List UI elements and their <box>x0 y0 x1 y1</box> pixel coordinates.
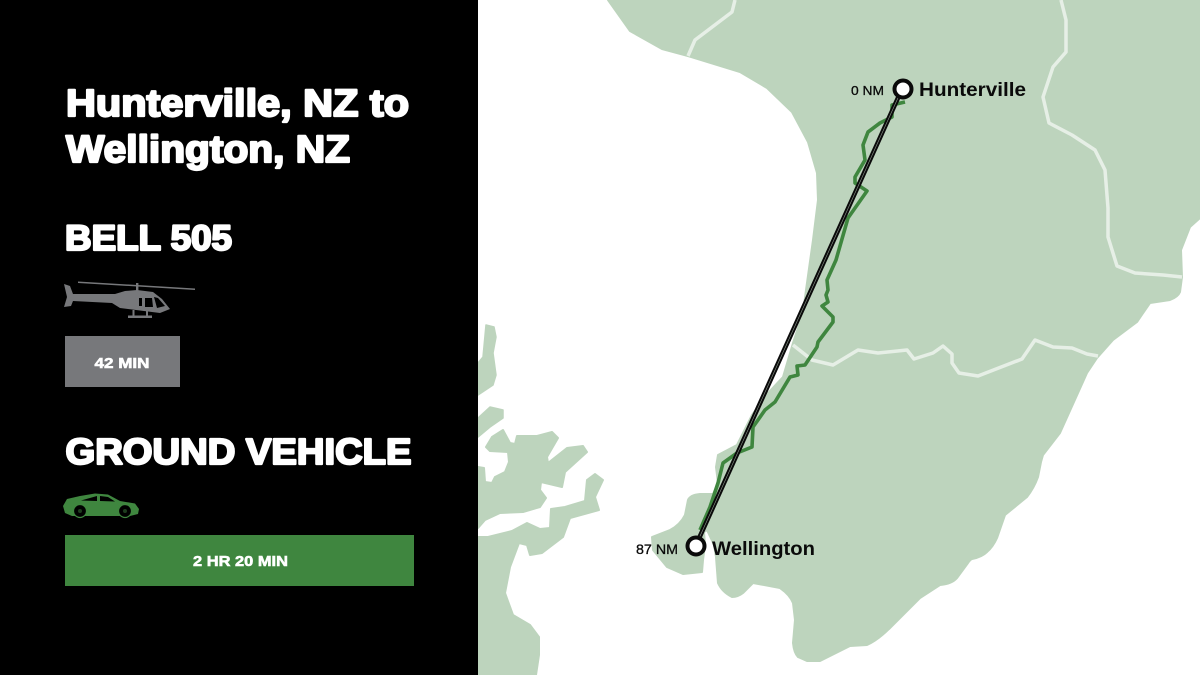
panel: left sidebar <box>0 0 478 675</box>
bar: ground vehicle time <box>65 535 414 586</box>
land: western island, south <box>478 474 603 675</box>
map <box>478 0 1200 675</box>
marker: Wellington <box>688 538 704 554</box>
region borders <box>688 0 1182 376</box>
title: Wellington, NZ <box>66 129 350 171</box>
heading: Bell 505: BELL 505 <box>65 219 232 258</box>
land: western island, sound <box>478 430 587 528</box>
title <box>66 83 409 171</box>
marker: Hunterville <box>894 80 912 98</box>
icon: helicopter <box>64 282 195 318</box>
icon: car <box>63 494 139 518</box>
land: western island, small headland <box>478 407 503 437</box>
bar: ground vehicle time: 2 HR 20 MIN <box>193 553 288 570</box>
ground vehicle route <box>700 102 905 530</box>
bar: helicopter time <box>65 336 180 387</box>
bar: helicopter time: 42 MIN <box>94 355 150 372</box>
label: Wellington: Wellington <box>712 539 815 560</box>
label: 87 NM: 87 NM <box>636 541 678 557</box>
land: north and south island mainland <box>608 0 1200 661</box>
title: Hunterville, NZ to <box>66 83 409 125</box>
label: 0 NM: 0 NM <box>851 83 884 98</box>
land: western island, north tip <box>478 325 496 395</box>
label: Hunterville: Hunterville <box>919 80 1026 101</box>
heading: ground vehicle: GROUND VEHICLE <box>66 431 412 472</box>
helicopter direct route <box>696 89 902 545</box>
